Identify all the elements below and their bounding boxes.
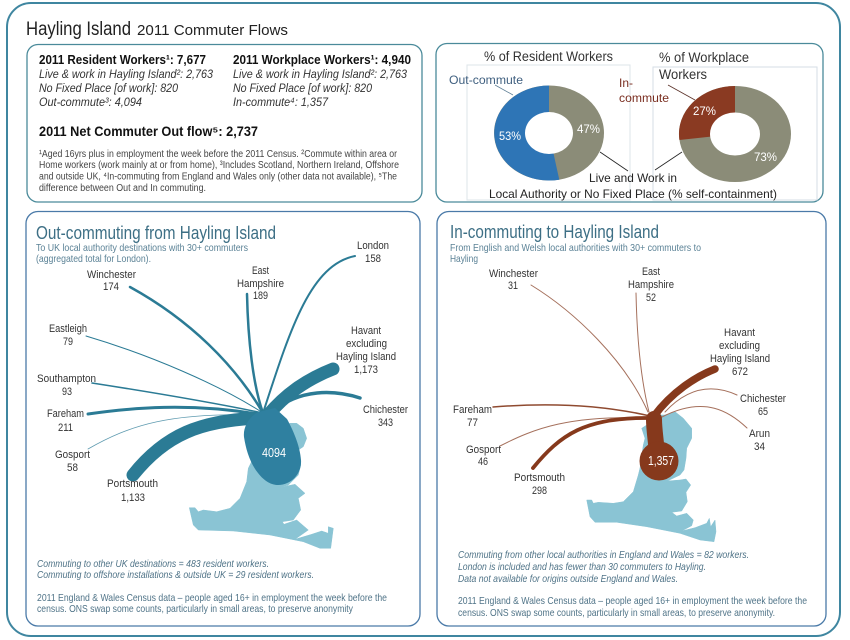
destination labels: out-commuting: 158 [365,253,381,265]
out-commute callout [449,73,523,95]
destination labels: out-commuting: 79 [63,336,73,348]
self-containment callout: Live and Work in [589,171,677,185]
donut headings [484,49,749,82]
workplace workers donut [679,86,791,182]
footnotes: difference between Out and In commuting. [39,183,206,194]
destination labels: out-commuting: Havant [351,325,381,337]
destination labels: out-commuting: 211 [58,422,73,434]
heading: out-commuting: (aggregated total for London). [36,253,151,265]
footnotes: Home workers (work mainly at or from home), ³Includes Scotland, Northern Ireland, Offshore [39,160,399,171]
panel: in-commuting [437,212,826,626]
origin labels: in-commuting: Portsmouth [514,472,565,484]
notes: in-commuting: Data not available for origins outside England and Wales. [458,573,678,585]
hub: total out-commuters [244,408,301,485]
heading: in-commuting [450,222,701,265]
notes: in-commuting: London is included and has fewer than 30 commuters to Hayling. [458,561,706,573]
donut headings: Workers [659,67,707,82]
flow lines: out-commuting [86,256,360,475]
destination labels: out-commuting: Chichester [363,404,408,416]
origin labels: in-commuting: Havant [724,327,755,339]
origin labels: in-commuting: Chichester [740,393,786,405]
resident workers stats: Live & work in Hayling Island²: 2,763 [39,67,213,81]
destination labels: out-commuting: 343 [378,417,393,429]
origin labels: in-commuting: 52 [646,292,656,304]
title: 2011 Commuter Flows [137,22,288,39]
destination labels: out-commuting: Portsmouth [107,478,158,490]
in-commute callout: commute [619,91,669,105]
hub: total in-commuters: 1,357 [648,453,674,468]
origin labels: in-commuting [453,266,786,497]
map: Hayling Island outline [587,412,716,542]
origin labels: in-commuting: 65 [758,406,768,418]
workplace workers stats: In-commute⁴: 1,357 [233,95,329,109]
notes: out-commuting: Commuting to other UK destinations = 483 resident workers. [37,558,269,570]
in-commute callout: In- [619,76,633,90]
notes: in-commuting [458,549,807,619]
origin labels: in-commuting: Fareham [453,404,492,416]
heading: out-commuting: Out-commuting from Hayling Island [36,223,276,243]
resident workers stats: No Fixed Place [of work]: 820 [39,81,178,95]
destination labels: out-commuting: East [252,265,269,277]
hub: total out-commuters: 4094 [262,445,286,460]
destination labels: out-commuting: Southampton [37,373,96,385]
notes: in-commuting: census. ONS swap some counts, particularly in small areas, to preserve anonymity. [458,607,775,619]
origin labels: in-commuting: Winchester [489,268,538,280]
panel: donut charts [436,44,823,202]
destination labels: out-commuting: Winchester [87,269,136,281]
resident workers stats [39,53,213,109]
heading: in-commuting: In-commuting to Hayling Island [450,222,659,242]
origin labels: in-commuting: 31 [508,280,518,292]
destination labels: out-commuting: 93 [62,386,72,398]
heading: in-commuting: From English and Welsh local authorities with 30+ commuters to [450,242,701,254]
destination labels: out-commuting: London [357,240,389,252]
resident workers donut [494,86,604,180]
destination labels: out-commuting: Eastleigh [49,323,87,335]
heading: out-commuting [36,223,276,265]
origin labels: in-commuting: 77 [467,417,478,429]
destination labels: out-commuting: 189 [253,290,268,302]
hub: total in-commuters [640,419,678,480]
notes: out-commuting: census. ONS swap some counts, particularly in small areas, to preserve anonymity [37,603,354,615]
heading: in-commuting: Hayling [450,253,478,265]
donut headings: % of Workplace [659,50,749,65]
origin labels: in-commuting: Arun [749,428,770,440]
origin labels: in-commuting: excluding [719,340,760,352]
in-commute callout [619,76,695,105]
workplace workers stats [233,53,411,109]
title: Hayling Island [26,19,131,40]
resident workers donut: 53% [499,131,521,143]
destination labels: out-commuting: 58 [67,462,78,474]
panel: out-commuting [26,212,420,626]
notes: out-commuting: Commuting to offshore installations & outside UK = 29 resident workers. [37,569,314,581]
destination labels: out-commuting: Hayling Island [336,351,396,363]
destination labels: out-commuting: Hampshire [237,278,284,290]
flow lines: in-commuting [493,285,747,468]
out-commute callout: Out-commute [449,73,523,87]
destination labels: out-commuting [37,240,408,504]
origin labels: in-commuting: 672 [732,366,748,378]
self-containment callout: Local Authority or No Fixed Place (% self-containment) [489,187,777,201]
destination labels: out-commuting: 174 [103,281,119,293]
origin labels: in-commuting: East [642,266,660,278]
destination labels: out-commuting: Gosport [55,449,90,461]
resident workers donut: 47% [577,124,600,136]
destination labels: out-commuting: Fareham [47,408,84,420]
self-containment callout [489,152,777,201]
origin labels: in-commuting: 34 [754,441,765,453]
workplace workers stats: No Fixed Place [of work]: 820 [233,81,372,95]
origin labels: in-commuting: 298 [532,485,547,497]
footnotes: ¹Aged 16yrs plus in employment the week before the 2011 Census. ²Commute within area or [39,149,398,160]
donut headings: % of Resident Workers [484,49,613,64]
workplace workers stats: 2011 Workplace Workers¹: 4,940 [233,53,411,67]
destination labels: out-commuting: 1,173 [354,364,378,376]
resident workers stats: 2011 Resident Workers¹: 7,677 [39,53,206,67]
panel: summary statistics [27,44,422,202]
notes: in-commuting: Commuting from other local authorities in England and Wales = 82 workers. [458,549,749,561]
map: Hayling Island outline [189,423,333,548]
workplace workers stats: Live & work in Hayling Island²: 2,763 [233,67,407,81]
footnotes [39,149,399,194]
notes: out-commuting [37,558,387,615]
notes: out-commuting: 2011 England & Wales Census data – people aged 16+ in employment the week before the [37,592,387,604]
origin labels: in-commuting: 46 [478,456,488,468]
origin labels: in-commuting: Hayling Island [710,353,770,365]
origin labels: in-commuting: Hampshire [628,279,674,291]
destination labels: out-commuting: excluding [346,338,387,350]
destination labels: out-commuting: 1,133 [121,492,145,504]
title [26,19,288,40]
heading: out-commuting: To UK local authority destinations with 30+ commuters [36,242,248,254]
resident workers stats: Out-commute³: 4,094 [39,95,142,109]
net commuter flow: 2011 Net Commuter Out flow⁵: 2,737 [39,124,258,139]
origin labels: in-commuting: Gosport [466,444,501,456]
workplace workers donut: 27% [693,106,716,118]
footnotes: and outside UK, ⁴In-commuting from England and Wales only (other data not available), ⁵The [39,172,397,182]
workplace workers donut: 73% [754,152,777,164]
